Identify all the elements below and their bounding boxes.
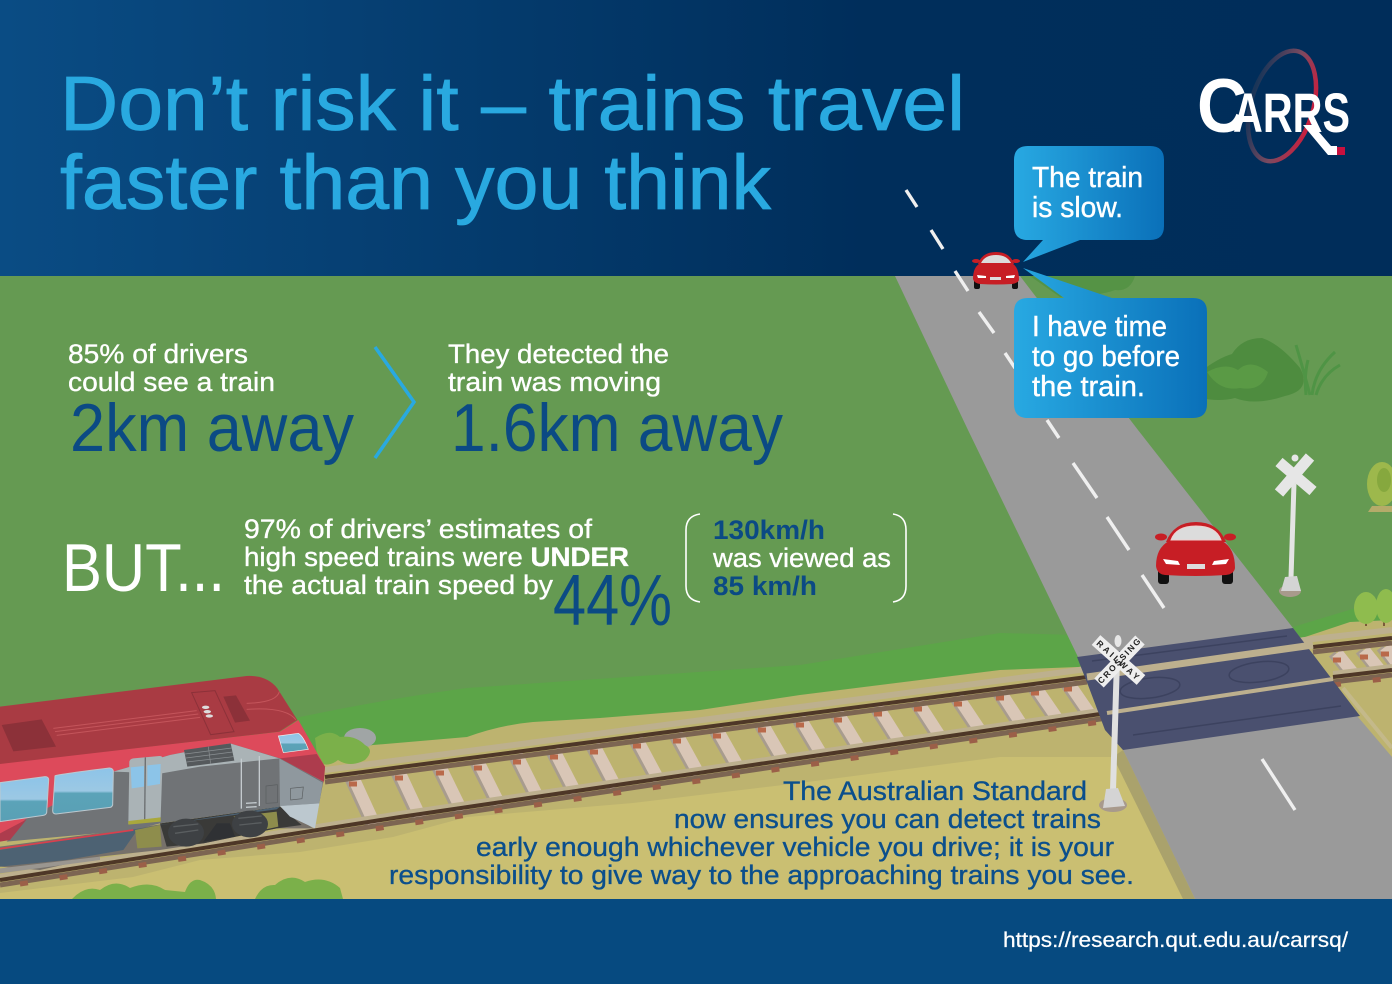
bracket callout bbox=[686, 514, 906, 602]
light grey top bbox=[113, 743, 279, 773]
centre dashes bbox=[906, 190, 1295, 810]
ground scene bbox=[0, 276, 1392, 899]
stat: 2km away: could see a train bbox=[68, 367, 275, 397]
speech bubble: I have time bbox=[1014, 268, 1207, 418]
far crossing sign bbox=[1279, 454, 1313, 597]
near crossing sign: CROSSING bbox=[1096, 636, 1143, 686]
bush behind road bbox=[1030, 276, 1135, 297]
stat: 2km away bbox=[68, 339, 354, 466]
speech bubble: the train is slow: is slow. bbox=[1032, 192, 1123, 224]
speech bubble: the train is slow bbox=[1014, 146, 1164, 262]
light green verge bbox=[0, 597, 1392, 899]
stat: 2km away: 2km away bbox=[70, 390, 354, 466]
grass tuft bbox=[1296, 345, 1340, 395]
stat: 1.6km away: train was moving bbox=[448, 367, 661, 397]
speech bubble: I have time: the train. bbox=[1032, 371, 1145, 403]
stat: 97 percent text: 97% of drivers’ estimates of bbox=[244, 514, 593, 544]
side windows bbox=[53, 768, 113, 814]
speech bubble: the train is slow: The train bbox=[1032, 162, 1143, 194]
near crossing sign: RAILWAY bbox=[1095, 638, 1142, 682]
Australian Standard note: responsibility to give way to the approaching trains you see. bbox=[389, 860, 1134, 890]
train under-frame bbox=[0, 807, 313, 870]
door bbox=[128, 756, 163, 824]
right trees bbox=[1368, 506, 1392, 512]
CARRS logo: C bbox=[1197, 64, 1247, 149]
title bbox=[60, 61, 965, 226]
roof bbox=[0, 676, 297, 764]
light sand bbox=[0, 757, 1200, 899]
train bbox=[0, 676, 325, 873]
railway tracks bbox=[0, 630, 1392, 885]
ladder rails bbox=[241, 756, 259, 809]
speech bubble: I have time: to go before bbox=[1032, 341, 1180, 373]
title: faster than you think bbox=[60, 140, 772, 226]
Australian Standard note: early enough whichever vehicle you drive; it is your bbox=[476, 832, 1114, 862]
speech bubble: I have time: I have time bbox=[1032, 311, 1167, 343]
footer band bbox=[0, 899, 1392, 984]
bracket callout: 85 km/h bbox=[713, 571, 817, 601]
train nose bbox=[279, 758, 323, 806]
stat: 1.6km away bbox=[448, 339, 783, 466]
Australian Standard note: now ensures you can detect trains bbox=[674, 804, 1101, 834]
stat: 44 percent: 44% bbox=[553, 561, 672, 641]
footer URL: https://research.qut.edu.au/carrsq/ bbox=[1003, 929, 1348, 952]
road bbox=[895, 190, 1392, 899]
stat: 97 percent text: the actual train speed by bbox=[244, 570, 554, 600]
large red car bbox=[1155, 522, 1236, 584]
dark sand bbox=[0, 620, 1392, 899]
stat: 2km away: 85% of drivers bbox=[68, 339, 248, 369]
CARRS logo bbox=[1197, 42, 1350, 170]
lower skirt bbox=[0, 807, 280, 867]
bracket callout: was viewed as bbox=[712, 543, 891, 573]
Australian Standard note bbox=[389, 776, 1134, 890]
bottom bushes bbox=[72, 880, 216, 899]
arrow: chevron bbox=[375, 347, 414, 458]
roof grille bbox=[184, 743, 234, 767]
BUT heading: BUT... bbox=[62, 530, 225, 606]
near crossing sign bbox=[1095, 635, 1143, 812]
title: Don’t risk it – trains travel bbox=[60, 61, 965, 147]
road shoulder bbox=[1113, 750, 1195, 899]
bogie wheels bbox=[168, 819, 204, 847]
railway sleepers bbox=[348, 647, 1392, 826]
bushes and trees bbox=[72, 276, 1392, 899]
bracket callout: 130km/h bbox=[713, 515, 825, 545]
header band bbox=[0, 0, 1392, 276]
stat: 97 percent text: high speed trains were UNDER bbox=[244, 542, 629, 572]
CARRS logo: ARRS bbox=[1233, 81, 1350, 144]
Australian Standard note: The Australian Standard bbox=[783, 776, 1087, 806]
bush by train bbox=[344, 728, 376, 748]
small red car bbox=[972, 252, 1020, 289]
bush right of bubble bbox=[1200, 338, 1304, 402]
stat: 1.6km away: 1.6km away bbox=[451, 390, 783, 466]
stat: 97 percent text bbox=[244, 514, 629, 600]
cab window bbox=[278, 733, 308, 753]
level crossing panel bbox=[1077, 628, 1360, 750]
dark red nose panel bbox=[280, 754, 325, 782]
bright red body bbox=[0, 720, 325, 842]
grey body bbox=[7, 743, 323, 842]
roof details bbox=[2, 719, 56, 751]
stat: 1.6km away: They detected the bbox=[448, 339, 669, 369]
